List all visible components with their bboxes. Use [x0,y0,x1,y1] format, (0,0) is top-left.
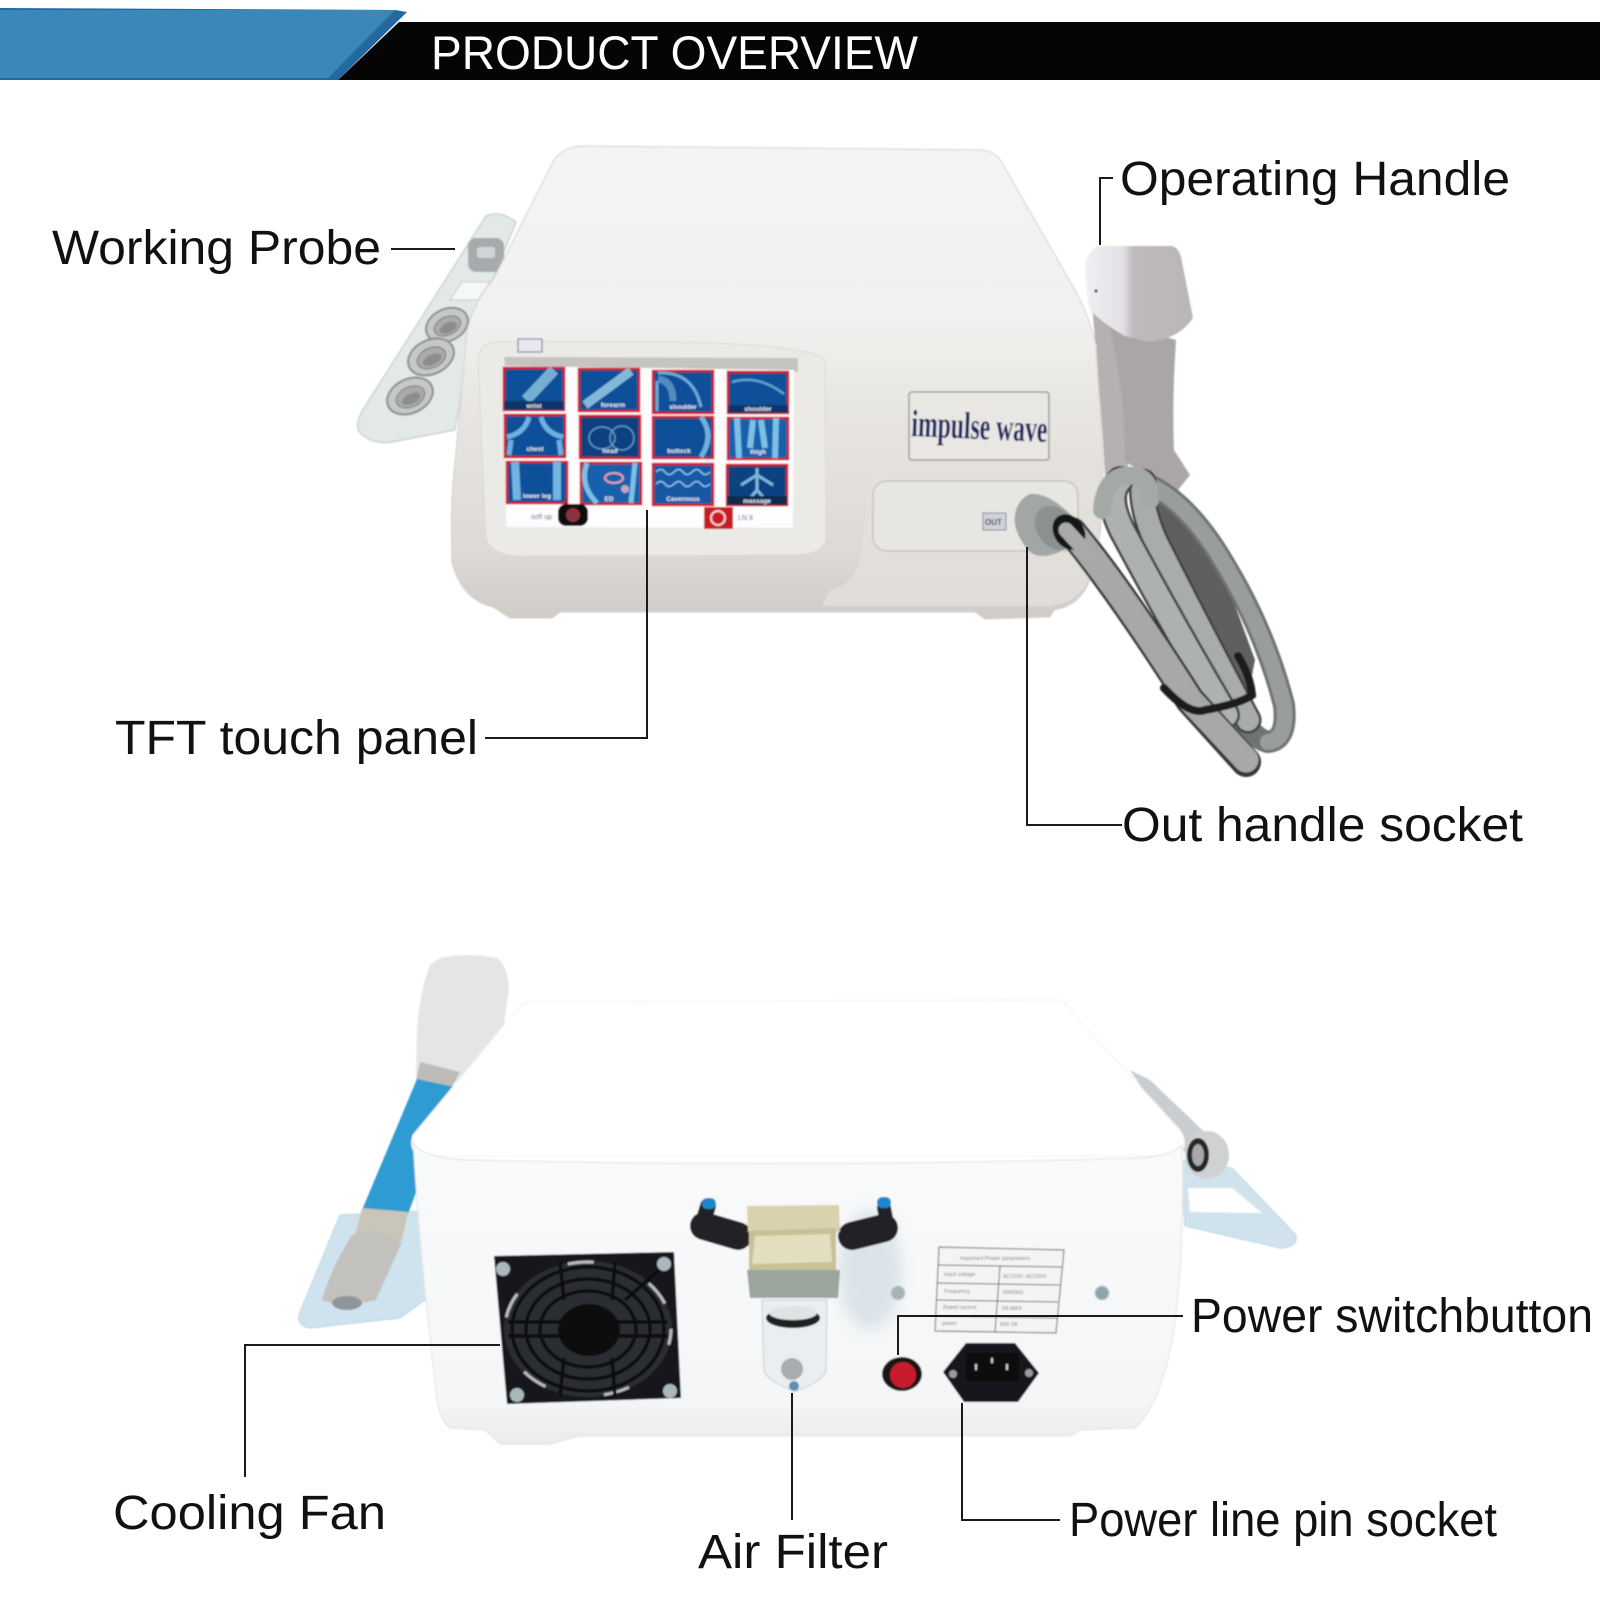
screen tile 2 [579,369,639,411]
bezel logo [518,339,542,352]
screen tile 6 [580,416,640,458]
screw right [1095,1286,1109,1300]
left screen button [531,504,588,526]
cable loop three [1113,480,1226,715]
spec label: 500 VA [1000,1322,1018,1328]
label: Out handle socket [1027,547,1523,852]
output connector [1015,494,1092,558]
handle dot [1094,289,1098,293]
connector collar [1046,508,1092,556]
banner blue dark edge [0,8,407,80]
probe inner [477,247,495,258]
filter cap [747,1205,840,1232]
probe tray [358,214,516,442]
label: TFT touch panel: TFT touch panel [115,712,478,765]
label: TFT touch panel [115,510,647,765]
spec label: Input voltage [944,1272,976,1278]
operating handle [1086,246,1193,490]
screen tile 3 [653,371,713,413]
label: Air Filter: Air Filter [698,1526,888,1579]
label frame [935,1247,1064,1333]
left fitting [702,1198,738,1236]
tray plate [358,214,516,442]
tray slot [450,282,490,300]
filter body [749,1228,836,1272]
bowl ring [766,1308,820,1328]
lower right body panel [822,462,1100,606]
screen tile 9: lower leg [523,493,551,500]
cable outer loop [1130,478,1285,742]
beige sleeve [354,1208,408,1240]
brand text: impulse wave [911,403,1048,451]
cable top arc [1102,476,1150,510]
screen tile 8: thigh [750,449,766,456]
fan guard rings [508,1262,668,1396]
device top [412,1000,1185,1156]
right fitting [852,1197,891,1236]
handle neck [1108,320,1190,490]
label: Operating Handle [1100,153,1510,245]
header banner [0,8,1600,80]
fan screw 4 [663,1384,677,1398]
cable inner shadow [1140,490,1255,710]
fan screw 1 [496,1262,510,1276]
right tray and probe [1130,1070,1296,1248]
blue tube [362,1079,455,1214]
left screen button: soft up [531,514,552,521]
brand plate [909,392,1049,460]
screen tile 12 [727,465,787,505]
screen tile 1: wrist [525,403,542,410]
label: Out handle socket: Out handle socket [1122,799,1523,852]
spec label [935,1247,1064,1333]
screen tile 1 [504,368,564,410]
screen tile 5 [505,415,565,457]
spec label: Frequency [944,1289,970,1295]
drain valve [781,1358,803,1380]
right screen button: LN.9 [738,515,753,522]
spec label: AC110V–AC220V [1003,1274,1047,1280]
screen tile 7: buttock [667,448,691,455]
screen tile 10 [581,463,641,504]
screen tile 7 [653,417,713,458]
fan light crescents [505,1262,671,1396]
screen tile 3: shoulder [669,404,697,411]
socket pins [975,1358,1008,1370]
title: PRODUCT OVERVIEW [431,26,919,79]
label: Working Probe: Working Probe [52,222,381,275]
fan opening [504,1261,672,1397]
cable zip tie [1164,656,1252,711]
filter base [747,1270,840,1298]
plate box [909,392,1049,460]
handle head [416,955,509,1082]
label: Power line pin socket [962,1403,1497,1547]
screen tile 8 [728,418,788,459]
connector sleeve [1026,498,1084,558]
filter bowl [762,1300,827,1391]
touch screen [505,366,794,528]
banner blue tab [0,10,395,78]
socket plate [943,1343,1039,1402]
device body [451,146,1103,619]
label: Power switchbutton [898,1290,1593,1355]
screen tile 4: shoulder [744,406,772,413]
screen tile 12: massage [743,498,771,505]
left tray [299,1210,440,1328]
socket screws [949,1370,957,1378]
device front [413,1142,1183,1444]
shadow [838,1210,902,1330]
spec label: 5A MAX [1002,1306,1022,1312]
handle head [1086,246,1193,342]
tray ring 2 [402,331,460,383]
air filter [702,1197,902,1391]
panel recess [873,481,1078,551]
label: Operating Handle: Operating Handle [1120,153,1510,206]
output socket panel: OUT [985,518,1002,527]
probe arm [1130,1070,1218,1160]
screen tile 11 [653,464,713,505]
handle back stem [1092,305,1128,475]
banner black bar [338,22,1600,80]
spec label: Rated current [943,1305,977,1311]
connector body [1015,494,1076,556]
fan screw 3 [510,1388,524,1402]
fan screw 2 [657,1257,671,1271]
screen tile 4 [728,372,788,413]
screen tile 2: forearm [601,402,625,409]
right screen button [704,507,753,529]
front view device [358,146,1285,762]
tray ring 3 [381,370,439,422]
working probe head [468,238,504,272]
handle collar [416,1062,460,1087]
cable loop two [1142,482,1248,720]
probe ring [1185,1131,1229,1179]
left handle [299,955,509,1328]
tip metal [332,1296,362,1310]
right tray plate [1180,1160,1296,1248]
handle tip [322,1231,402,1304]
label: Cooling Fan: Cooling Fan [113,1487,386,1540]
cable bundle [1072,476,1285,762]
cable main [1072,532,1246,762]
output label [983,513,1006,530]
output socket panel [873,481,1078,551]
screen frame [504,357,798,372]
label: Cooling Fan [113,1345,500,1540]
spec label: Important Power parameters [960,1256,1030,1262]
label: Power line pin socket: Power line pin socket [1069,1494,1497,1547]
screen tile 9 [507,462,567,503]
screen tile 5: chest [527,446,544,453]
connector cable end [1066,530,1090,556]
tray ring 1 [420,301,474,349]
label: Power switchbutton: Power switchbutton [1191,1290,1593,1343]
filter body shade [752,1234,832,1264]
power button [882,1357,922,1391]
fan hub [558,1304,620,1356]
screw left [891,1286,905,1300]
power socket [943,1343,1039,1402]
screen tile 11: Cavernous [666,496,700,503]
tray hole [1188,1188,1262,1213]
spec label: 50/60Hz [1003,1290,1024,1296]
cooling fan [494,1252,681,1404]
screen tile 6: head [602,448,618,455]
rear view device [299,955,1296,1444]
screen tile 10: ED [604,496,614,503]
socket recess [966,1353,1019,1381]
spec label: power [942,1321,957,1327]
fan housing [494,1252,681,1404]
screen bezel [478,342,826,556]
